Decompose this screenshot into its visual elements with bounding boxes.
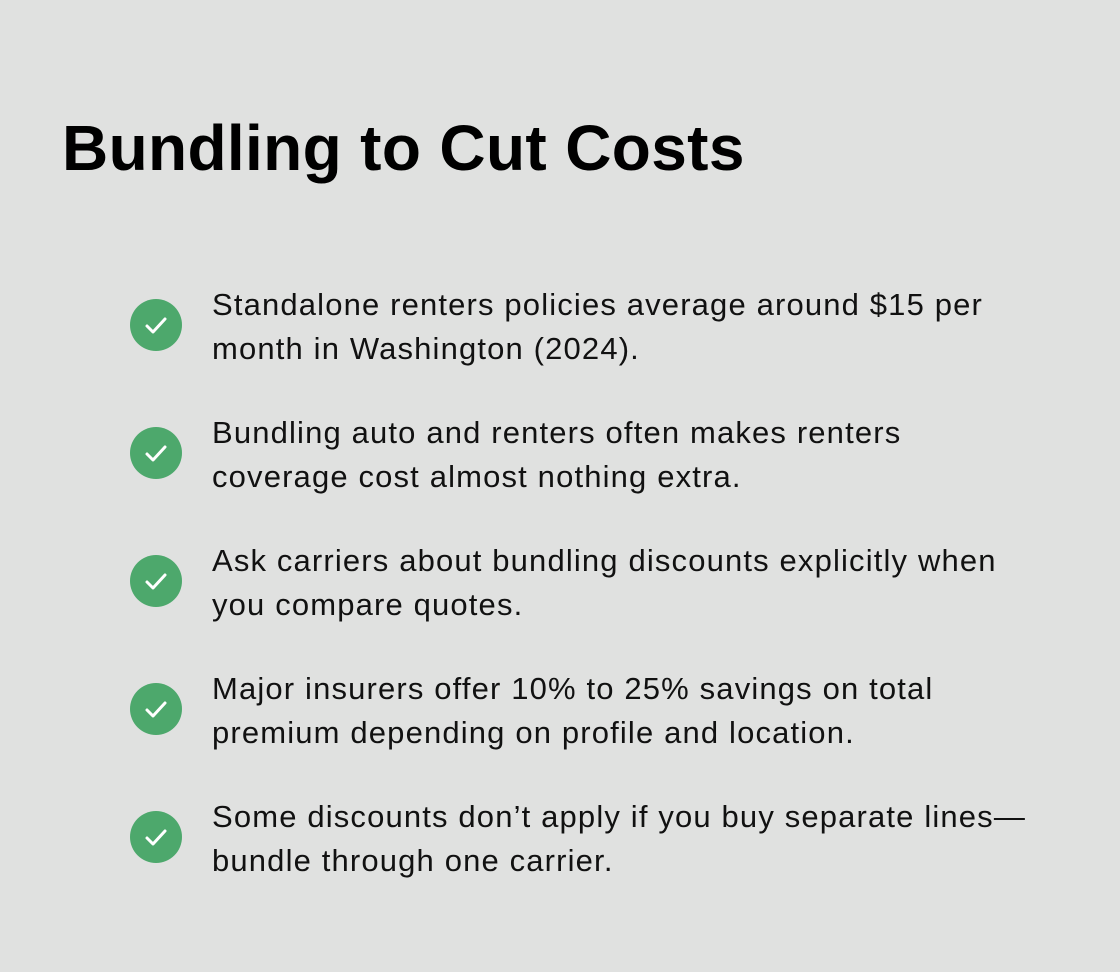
icon: check (130, 299, 182, 351)
text 4: premium depending on profile and location. (212, 715, 855, 750)
icon: check (130, 555, 182, 607)
text 5 (212, 799, 1026, 878)
item 3 (130, 543, 997, 622)
text 5: Some discounts don’t apply if you buy separate lines— (212, 799, 1026, 834)
text 4 (212, 671, 933, 750)
text 3: Ask carriers about bundling discounts explicitly when (212, 543, 997, 578)
text 1: month in Washington (2024). (212, 331, 640, 366)
icon: check (130, 811, 182, 863)
text 2: Bundling auto and renters often makes renters (212, 415, 901, 450)
title: Bundling to Cut Costs (62, 112, 745, 184)
item 4 (130, 671, 933, 750)
icon: check (130, 427, 182, 479)
text 2 (212, 415, 901, 494)
item 1 (130, 287, 983, 366)
text 4: Major insurers offer 10% to 25% savings on total (212, 671, 933, 706)
text 3: you compare quotes. (212, 587, 523, 622)
icon: check (130, 683, 182, 735)
text 1 (212, 287, 983, 366)
item 2 (130, 415, 901, 494)
item 5 (130, 799, 1026, 878)
text 2: coverage cost almost nothing extra. (212, 459, 742, 494)
text 3 (212, 543, 997, 622)
text 5: bundle through one carrier. (212, 843, 614, 878)
text 1: Standalone renters policies average around $15 per (212, 287, 983, 322)
